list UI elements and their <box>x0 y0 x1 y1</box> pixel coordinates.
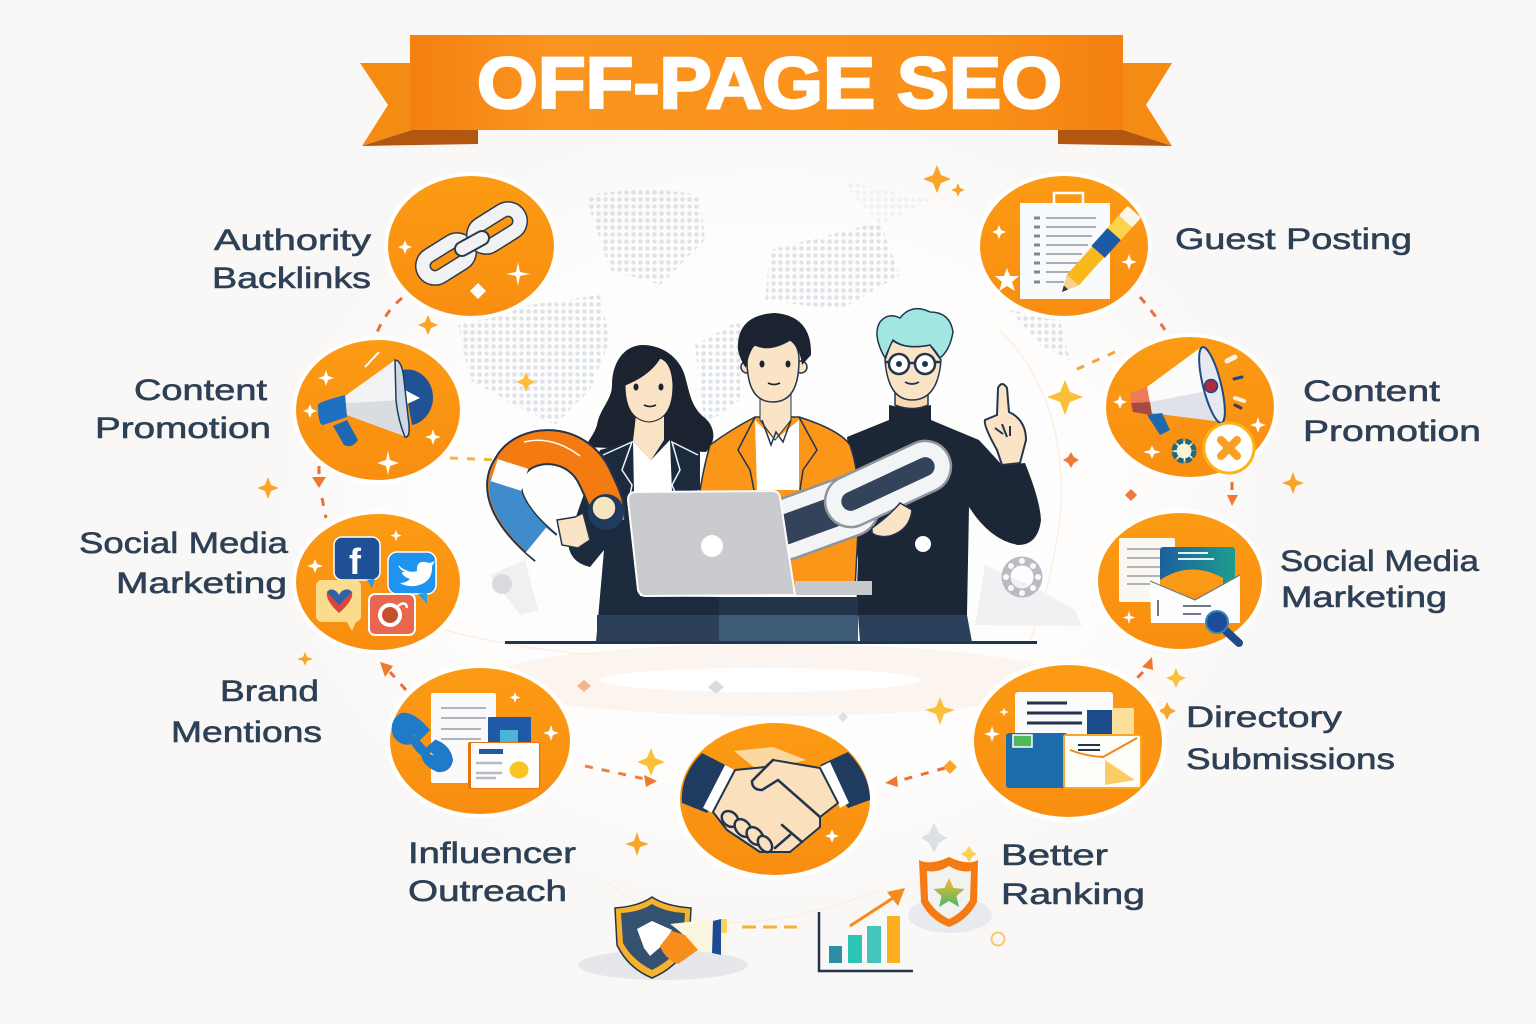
label: content promotion left <box>95 374 271 445</box>
icon: hands <box>713 760 838 852</box>
label: better ranking: Better <box>1001 839 1108 872</box>
hand: holding magnet <box>557 494 624 548</box>
icon: facebook: f <box>349 541 362 582</box>
icon: instagram <box>369 594 415 635</box>
icon: phone <box>395 716 450 769</box>
label: authority backlinks: Authority <box>214 224 371 257</box>
label: social media right <box>1280 545 1479 614</box>
icon: envelope <box>1064 735 1141 788</box>
icon: gear <box>1174 441 1194 461</box>
label: content promotion right: Promotion <box>1303 415 1481 448</box>
panel: content promotion left icon <box>296 340 460 480</box>
label: better ranking: Ranking <box>1001 878 1145 911</box>
right ribbon tail <box>1123 63 1172 146</box>
panel: content promotion right icon <box>1106 337 1274 477</box>
gear backdrop <box>1003 558 1041 596</box>
icon: envelope with folders <box>1150 547 1240 623</box>
title text: OFF-PAGE SEO <box>477 44 1062 124</box>
icon: card <box>468 742 540 789</box>
panel: guest posting icon <box>980 176 1148 316</box>
horseshoe magnet <box>504 440 608 549</box>
left ribbon tail <box>360 63 412 146</box>
icon: cancel badge <box>1204 423 1254 473</box>
bar chart <box>819 888 913 971</box>
label: brand mentions <box>171 675 322 749</box>
panel: authority backlinks icon <box>388 176 554 316</box>
icon: pencil <box>1055 206 1141 298</box>
person: man <box>694 313 859 590</box>
label: content promotion left: Content <box>134 374 268 407</box>
icon: twitter <box>388 552 436 604</box>
label: better ranking <box>1001 839 1145 911</box>
label: social media left <box>79 527 288 600</box>
label: directory submissions <box>1186 701 1395 776</box>
label: brand mentions: Mentions <box>171 716 322 749</box>
label: influencer outreach: Influencer <box>408 837 576 870</box>
icon: blue folder <box>1006 733 1068 788</box>
world map backdrop <box>458 180 1070 425</box>
icon: paper <box>1015 692 1134 742</box>
dashed connectors <box>319 297 1232 927</box>
icon: facebook <box>334 537 380 588</box>
hand: pointing <box>985 384 1026 465</box>
label: influencer outreach <box>408 837 576 908</box>
arrow: growth <box>850 888 905 926</box>
icon: document <box>431 693 496 783</box>
label: brand mentions: Brand <box>220 675 319 708</box>
label: authority backlinks: Backlinks <box>212 262 371 295</box>
label: social media left: Social Media <box>79 527 288 560</box>
icon: megaphone <box>318 360 433 446</box>
icon: megaphone <box>1130 345 1230 435</box>
person: woman <box>568 345 722 642</box>
desk <box>719 597 858 642</box>
label: content promotion right <box>1303 375 1481 448</box>
label: directory submissions: Directory <box>1186 701 1342 734</box>
icon: right sleeve <box>820 752 870 808</box>
person: right with raised finger <box>847 309 1041 642</box>
label: content promotion right: Content <box>1303 375 1441 408</box>
small ring marker <box>992 932 1004 946</box>
chain: large links <box>757 444 948 558</box>
laptop <box>628 491 872 596</box>
label: authority backlinks <box>212 224 371 295</box>
icon: handshake shield <box>578 897 748 980</box>
panel: directory submissions icon <box>974 665 1162 817</box>
label: content promotion left: Promotion <box>95 412 271 445</box>
icon: star shield <box>908 846 992 933</box>
label: guest posting: Guest Posting <box>1175 223 1412 256</box>
panel: social media left icon <box>296 514 460 650</box>
people illustration <box>504 309 1041 642</box>
icon: chain <box>418 205 525 282</box>
desk line <box>505 641 1037 644</box>
arrowheads <box>312 477 1238 787</box>
icon: left sleeve <box>682 753 735 813</box>
sparkles <box>257 165 1304 856</box>
icon: clipboard <box>1020 193 1110 299</box>
label: social media right: Social Media <box>1280 545 1479 578</box>
icon: documents <box>1119 538 1175 602</box>
panel: influencer outreach icon <box>390 668 570 814</box>
label: social media right: Marketing <box>1281 581 1447 614</box>
panel: handshake icon <box>680 723 870 875</box>
icon: magnifier <box>1206 611 1239 643</box>
label: influencer outreach: Outreach <box>408 875 567 908</box>
label: directory submissions: Submissions <box>1186 743 1395 776</box>
icon: heart badge <box>316 580 361 631</box>
hand: holding chain <box>872 503 912 537</box>
panel: social media right icon <box>1098 513 1262 649</box>
label: social media left: Marketing <box>116 567 287 600</box>
title banner <box>360 35 1172 146</box>
